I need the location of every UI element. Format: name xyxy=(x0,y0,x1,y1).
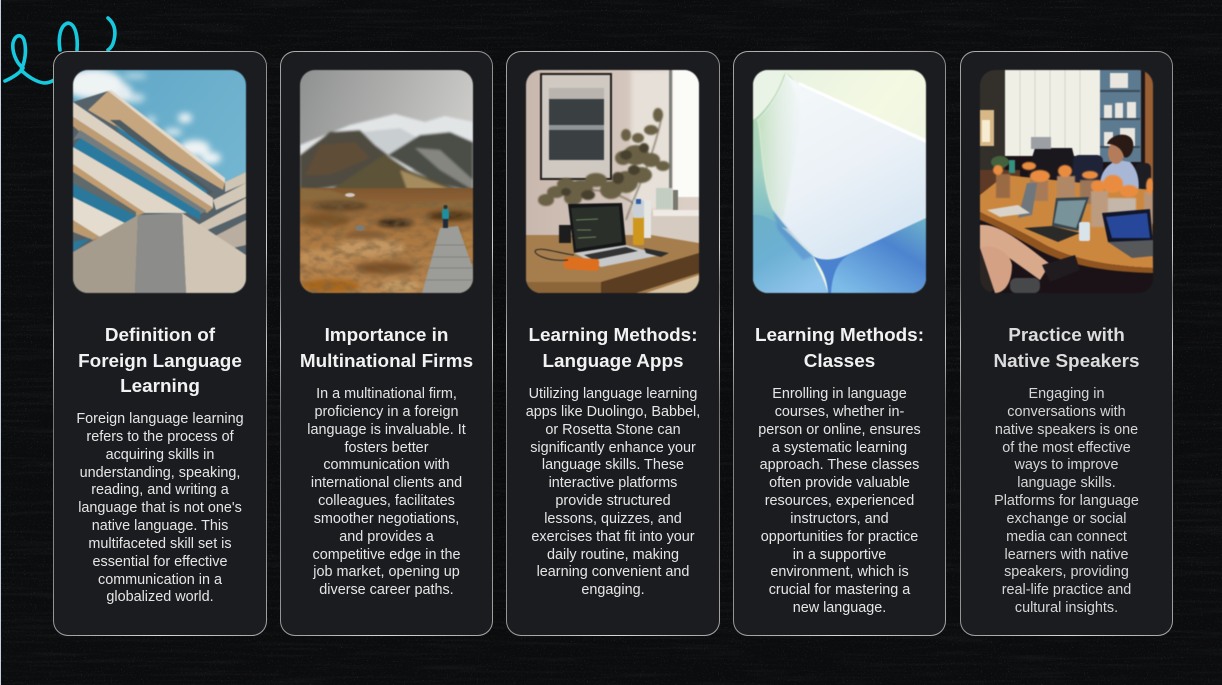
heading: Learning Methods: xyxy=(755,325,924,346)
body text: acquiring skills in xyxy=(106,447,214,463)
body text: Foreign language learning xyxy=(76,411,244,427)
heading: Language Apps xyxy=(542,350,684,372)
body text xyxy=(526,386,700,598)
heading xyxy=(994,325,1139,372)
body text: native speakers is one xyxy=(995,422,1138,438)
image: modern building xyxy=(72,69,247,294)
image: laptop on desk xyxy=(525,69,700,294)
body text xyxy=(307,386,466,598)
body text: Utilizing language learning xyxy=(529,386,697,402)
body text: smoother negotiations, xyxy=(314,511,459,527)
body text: essential for effective xyxy=(93,554,227,570)
body text: language skills. These xyxy=(542,457,684,473)
body text: colleagues, facilitates xyxy=(318,493,455,509)
body text: cultural insights. xyxy=(1015,600,1118,616)
body text: lessons, quizzes, and xyxy=(544,511,682,527)
body text: job market, opening up xyxy=(313,564,460,580)
body text: competitive edge in the xyxy=(312,547,460,563)
body text: language that is not one's xyxy=(78,500,242,516)
heading: Learning Methods: xyxy=(529,325,697,346)
heading: Classes xyxy=(804,350,875,372)
body text: Enrolling in language xyxy=(772,386,907,402)
body text: speakers, providing xyxy=(1004,564,1129,580)
body text: engaging. xyxy=(581,582,645,598)
body text: approach. These classes xyxy=(760,457,919,473)
body text: provide structured xyxy=(555,493,671,509)
body text: interactive platforms xyxy=(549,475,677,491)
body text: learning convenient and xyxy=(537,564,689,580)
image: mountain trail xyxy=(299,69,474,294)
heading xyxy=(300,325,473,372)
body text: globalized world. xyxy=(106,589,214,605)
body text: in a supportive xyxy=(793,547,886,563)
body text: Platforms for language xyxy=(994,493,1139,509)
heading: Practice with xyxy=(1008,325,1125,346)
body text: apps like Duolingo, Babbel, xyxy=(526,404,700,420)
body text: resources, experienced xyxy=(765,493,914,509)
body text: communication with xyxy=(323,457,450,473)
card: native speakers xyxy=(960,51,1173,636)
body text: reading, and writing a xyxy=(91,482,229,498)
body text: international clients and xyxy=(311,475,462,491)
body text: often provide valuable xyxy=(769,475,910,491)
body text: real-life practice and xyxy=(1002,582,1131,598)
body text: learners with native xyxy=(1004,547,1128,563)
image: meeting room with laptops xyxy=(979,69,1154,294)
body text xyxy=(994,386,1139,616)
body text: understanding, speaking, xyxy=(80,465,240,481)
heading xyxy=(529,325,697,372)
image: abstract gradient xyxy=(752,69,927,294)
body text: and provides a xyxy=(339,529,434,545)
body text: courses, whether in- xyxy=(775,404,904,420)
body text: of the most effective xyxy=(1002,440,1131,456)
body text: Engaging in xyxy=(1028,386,1104,402)
heading: Importance in xyxy=(325,325,448,346)
body text: exchange or social xyxy=(1006,511,1126,527)
body text: a systematic learning xyxy=(772,440,907,456)
heading: Definition of xyxy=(105,325,215,346)
body text: daily routine, making xyxy=(547,547,679,563)
body text: conversations with xyxy=(1007,404,1126,420)
body text: media can connect xyxy=(1006,529,1127,545)
body text: person or online, ensures xyxy=(758,422,921,438)
body text: crucial for mastering a xyxy=(769,582,910,598)
body text: environment, which is xyxy=(770,564,909,580)
body text: new language. xyxy=(793,600,886,616)
body text: refers to the process of xyxy=(86,429,234,445)
body text xyxy=(76,411,244,605)
heading: Learning xyxy=(120,376,200,397)
body text: ways to improve xyxy=(1015,457,1118,473)
body text: opportunities for practice xyxy=(761,529,918,545)
body text: In a multinational firm, xyxy=(316,386,457,402)
body text: language is invaluable. It xyxy=(307,422,466,438)
heading xyxy=(755,325,924,372)
card: language apps xyxy=(506,51,720,636)
body text: proficiency in a foreign xyxy=(314,404,458,420)
body text: fosters better xyxy=(344,440,428,456)
body text: significantly enhance your xyxy=(530,440,696,456)
body text: exercises that fit into your xyxy=(531,529,695,545)
body text: or Rosetta Stone can xyxy=(545,422,681,438)
body text: multifaceted skill set is xyxy=(88,536,232,552)
card: importance xyxy=(280,51,493,636)
body text: instructors, and xyxy=(790,511,889,527)
heading xyxy=(78,325,242,397)
body text: native language. This xyxy=(92,518,228,534)
cyan handwritten scribble xyxy=(3,16,117,85)
heading: Foreign Language xyxy=(78,350,242,372)
heading: Multinational Firms xyxy=(300,350,473,372)
body text: communication in a xyxy=(98,572,222,588)
body text: diverse career paths. xyxy=(319,582,454,598)
heading: Native Speakers xyxy=(994,350,1139,372)
card: definition xyxy=(53,51,267,636)
card: classes xyxy=(733,51,946,636)
body text: language skills. xyxy=(1017,475,1116,491)
body text xyxy=(758,386,921,616)
